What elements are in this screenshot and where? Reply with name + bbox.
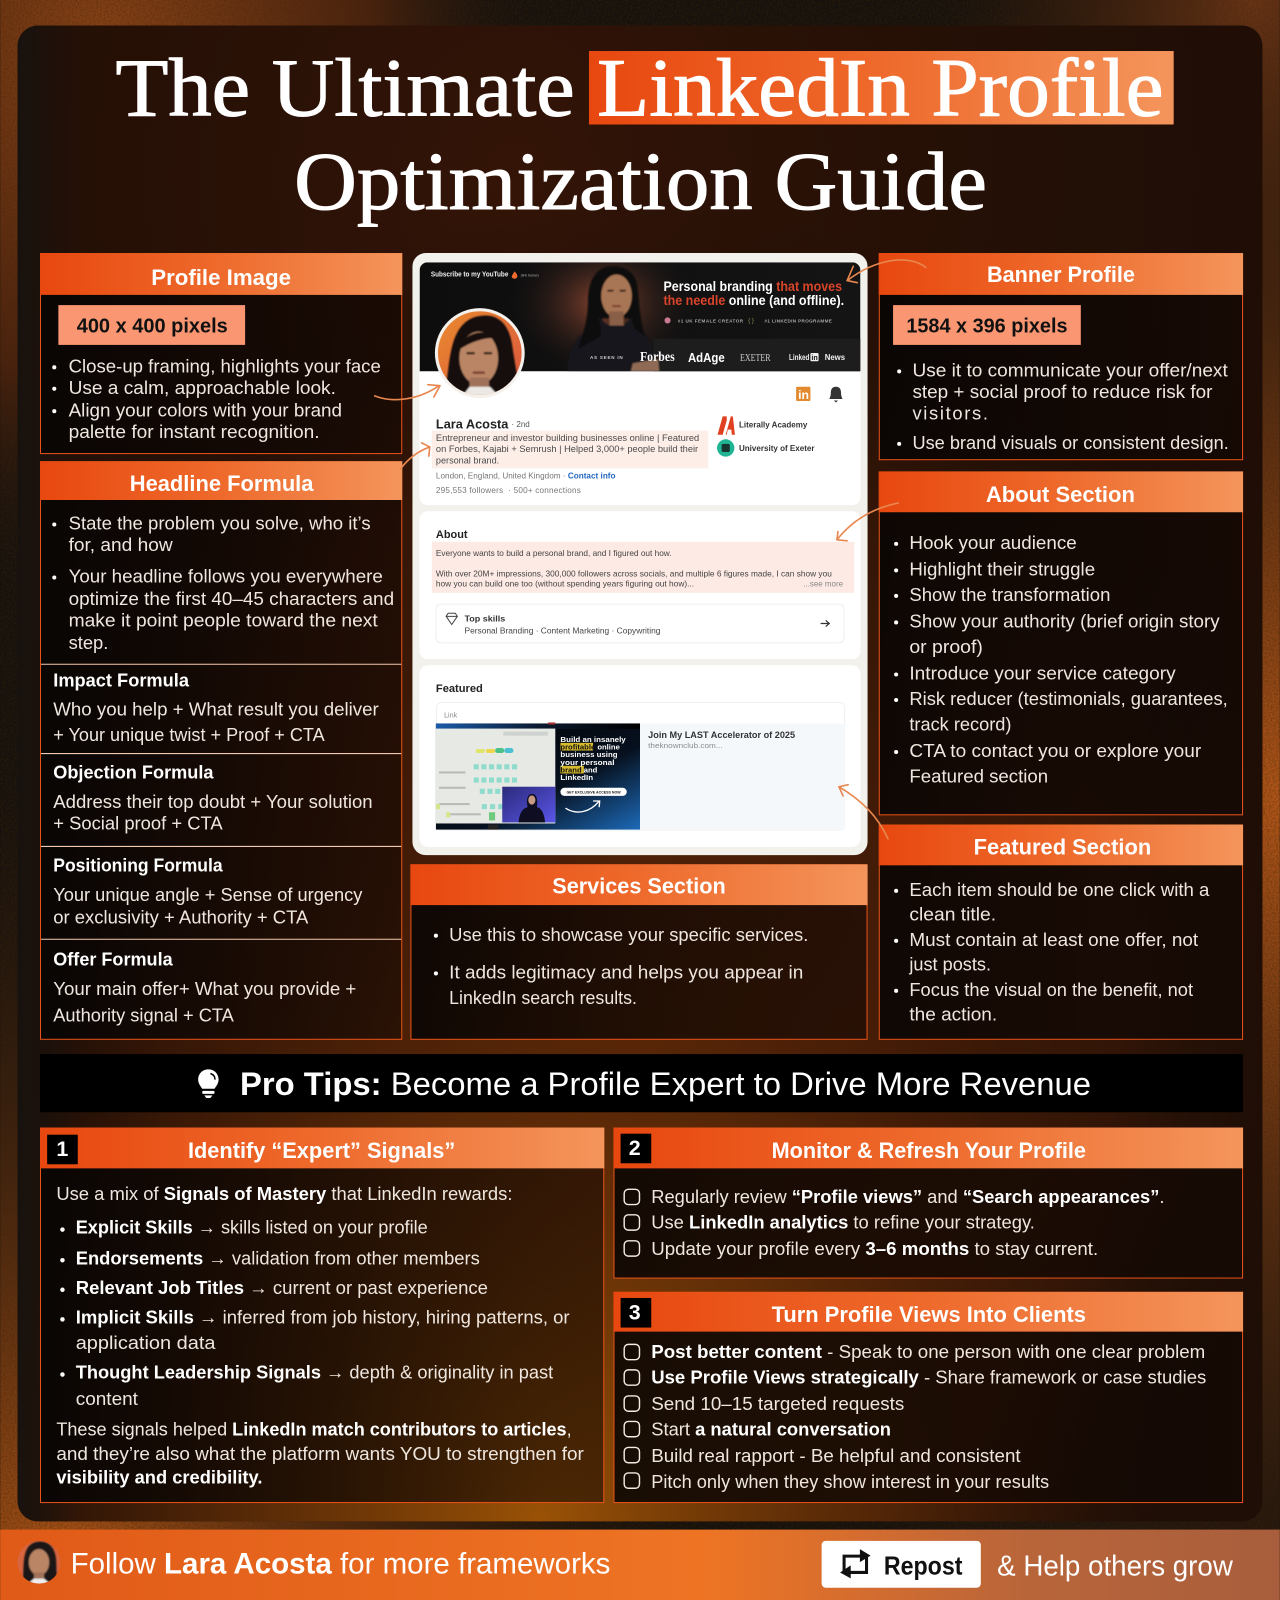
panel: featured section: Each item should be one click with a: [909, 879, 1210, 900]
heading: services section: Services Section: [552, 873, 726, 898]
impact formula: Who you help + What result you deliver: [53, 698, 379, 719]
panel: featured section: Focus the visual on the benefit, not: [909, 979, 1193, 1000]
panel: services section: It adds legitimacy and helps you appear in: [449, 962, 803, 983]
featured thumbnail: profitable online: [560, 742, 620, 751]
heading: headline formula: Headline Formula: [130, 471, 314, 496]
banner image: Forbes: [640, 349, 675, 364]
banner image: Subscribe to my YouTube: [431, 271, 508, 279]
number badge 3: 3: [629, 1300, 641, 1324]
panel 1: identify expert signals: application data: [76, 1332, 216, 1353]
panel: about section: Highlight their struggle: [909, 559, 1095, 580]
about highlight: ...see more: [803, 580, 844, 589]
about card: [420, 511, 860, 659]
heading: turn profile views into clients: Turn Profile Views Into Clients: [772, 1302, 1086, 1327]
featured thumbnail: business using: [560, 750, 618, 759]
headline highlight: Entrepreneur and investor building businesses online | Featured: [436, 433, 699, 443]
panel 1: identify expert signals: Endorsements → validation from other members: [76, 1247, 480, 1268]
panel 1: identify expert signals: visibility and credibility.: [56, 1467, 262, 1488]
arrow: featured section to featured: [839, 785, 888, 839]
positioning formula: Positioning Formula: [53, 854, 223, 875]
title: [116, 41, 1174, 227]
panel 3: turn profile views into clients: [613, 1292, 1243, 1503]
pro tips banner: [40, 1054, 1243, 1112]
offer formula: Offer Formula: [53, 948, 173, 969]
panel 1: identify expert signals: Thought Leadership Signals → depth & originality in past: [76, 1362, 553, 1383]
panel 3: turn profile views into clients: Use Profile Views strategically - Share framework or case studies: [651, 1367, 1206, 1388]
headline highlight: on Forbes, Kajabi + Semrush | Helped 3,000+ people build their: [436, 444, 698, 454]
featured thumbnail: Build an insanely: [560, 735, 626, 744]
panel: profile image: Use a calm, approachable look.: [69, 377, 336, 398]
title: LinkedIn Profile: [597, 41, 1163, 133]
panel: featured section: clean title.: [909, 903, 996, 924]
panel: about section: CTA to contact you or explore your: [909, 740, 1201, 761]
profile top card: · 2nd: [511, 420, 530, 429]
panel: profile image: 400 x 400 pixels: [77, 316, 228, 338]
profile avatar: [435, 308, 525, 400]
banner image: (link below): [521, 274, 539, 278]
company: literally academy: [718, 416, 808, 435]
panel: banner profile: Use brand visuals or consistent design.: [912, 432, 1229, 453]
panel: banner profile: step + social proof to reduce risk for: [912, 381, 1212, 402]
panel: headline formula: Your headline follows you everywhere: [69, 566, 383, 587]
objection formula: Address their top doubt + Your solution: [53, 791, 373, 812]
featured card: Featured: [436, 683, 483, 695]
video thumbnail: [502, 787, 555, 822]
title: The Ultimate: [116, 41, 575, 133]
linkedin profile mockup card: [412, 235, 868, 855]
impact formula: + Your unique twist + Proof + CTA: [53, 724, 325, 745]
heading: featured section: Featured Section: [974, 835, 1151, 860]
positioning formula: or exclusivity + Authority + CTA: [53, 906, 309, 927]
panel: banner profile: visitors.: [912, 402, 988, 423]
panel: headline formula: [40, 461, 402, 1039]
number badge 1: 1: [56, 1137, 68, 1161]
heading: banner profile: Banner Profile: [987, 262, 1135, 287]
panel 1: identify expert signals: Relevant Job Titles → current or past experience: [76, 1277, 488, 1298]
panel 3: turn profile views into clients: Send 10–15 targeted requests: [651, 1393, 904, 1414]
whiteboard: [436, 729, 555, 830]
panel: headline formula: step.: [69, 632, 108, 653]
offer formula: Your main offer+ What you provide +: [53, 978, 356, 999]
icon: bell: [829, 387, 843, 403]
company: literally academy: Literally Academy: [739, 421, 808, 430]
banner image: #1 UK FEMALE CREATOR: [678, 318, 744, 323]
panel: profile image: Align your colors with your brand: [69, 399, 342, 420]
profile top card: [420, 262, 860, 505]
panel: featured section: Must contain at least one offer, not: [909, 929, 1198, 950]
top skills box: Top skills: [464, 613, 505, 623]
panel: headline formula: State the problem you solve, who it’s: [69, 513, 371, 534]
panel 1: identify expert signals: [40, 1128, 604, 1503]
panel 3: turn profile views into clients: Post better content - Speak to one person with one clear problem: [651, 1341, 1205, 1362]
featured thumbnail: [436, 722, 640, 830]
featured description: theknownclub.com...: [648, 741, 723, 750]
objection formula: Objection Formula: [53, 762, 214, 783]
heading: monitor and refresh: Monitor & Refresh Your Profile: [772, 1138, 1086, 1163]
icon: repost: [841, 1550, 870, 1578]
footer avatar: [18, 1541, 60, 1585]
banner image: { }: [748, 317, 754, 324]
school: university of exeter: [717, 439, 815, 457]
panel 3: turn profile views into clients: Pitch only when they show interest in your results: [651, 1471, 1049, 1492]
panel: services section: [410, 864, 868, 1039]
featured card: Link: [444, 711, 458, 719]
panel: banner profile: Use it to communicate your offer/next: [912, 360, 1228, 381]
offer formula: Authority signal + CTA: [53, 1004, 235, 1025]
repost button: [822, 1541, 981, 1588]
panel: about section: Show your authority (brief origin story: [909, 611, 1220, 632]
panel: about section: Hook your audience: [909, 532, 1077, 553]
featured thumbnail: GET EXCLUSIVE ACCESS NOW: [567, 790, 621, 794]
panel: banner profile: 1584 x 396 pixels: [906, 316, 1068, 338]
banner image: in: [811, 354, 818, 362]
about highlight: Everyone wants to build a personal brand, and I figured out how.: [436, 549, 672, 558]
panel: about section: or proof): [909, 636, 983, 657]
panel: banner profile: [879, 253, 1243, 460]
heading: identify expert signals: Identify “Expert” Signals”: [188, 1138, 455, 1163]
icon: linkedin: [796, 387, 810, 402]
panel 3: turn profile views into clients: Build real rapport - Be helpful and consistent: [651, 1445, 1021, 1466]
about highlight: With over 20M+ impressions, 300,000 followers across socials, and multiple 6 figures made, I can show you: [436, 570, 832, 579]
school: university of exeter: University of Exeter: [739, 444, 815, 453]
panel 3: turn profile views into clients: Start a natural conversation: [651, 1419, 891, 1440]
panel 1: identify expert signals: These signals helped LinkedIn match contributors to articles,: [56, 1419, 572, 1440]
arrow: about section to about: [837, 503, 898, 541]
footer help text: & Help others grow: [997, 1551, 1233, 1583]
title: Optimization Guide: [294, 135, 987, 227]
panel 2: monitor and refresh: [613, 1128, 1243, 1278]
headline highlight: [432, 431, 708, 468]
profile location: London, England, United Kingdom · Contact info: [436, 472, 616, 481]
positioning formula: Your unique angle + Sense of urgency: [53, 884, 363, 905]
heading: about section: About Section: [986, 482, 1135, 507]
banner image: EXETER: [740, 353, 771, 364]
panel: featured section: the action.: [909, 1003, 997, 1024]
headline highlight: personal brand.: [436, 455, 499, 465]
panel 1: identify expert signals: and they’re also what the platform wants YOU to strengthen for: [56, 1443, 584, 1464]
panel: about section: Introduce your service category: [909, 663, 1177, 684]
icon: lightbulb: [198, 1069, 219, 1098]
about highlight: how you can build one too (without spending years figuring out how)...: [436, 580, 694, 589]
objection formula: + Social proof + CTA: [53, 813, 223, 834]
number badge 2: 2: [629, 1136, 641, 1160]
panel: about section: [879, 471, 1243, 815]
profile followers: 295,553 followers · 500+ connections: [436, 486, 581, 495]
panel 2: monitor and refresh: Use LinkedIn analytics to refine your strategy.: [651, 1212, 1035, 1233]
featured description: [640, 723, 845, 830]
panel 1: identify expert signals: Implicit Skills → inferred from job history, hiring patterns, or: [76, 1306, 570, 1327]
featured card: [420, 665, 860, 847]
banner image: Linked: [789, 353, 809, 362]
repost button: Repost: [884, 1552, 963, 1580]
number badge 3: [621, 1298, 651, 1328]
impact formula: [53, 670, 379, 745]
top skills box: Personal Branding · Content Marketing · Copywriting: [464, 627, 660, 636]
panel: about section: track record): [909, 714, 1011, 735]
banner image: AS SEEN IN: [590, 355, 623, 360]
panel 1: identify expert signals: Use a mix of Signals of Mastery that LinkedIn rewards:: [56, 1183, 512, 1204]
panel: about section: Risk reducer (testimonials, guarantees,: [909, 688, 1228, 709]
panel: services section: LinkedIn search results.: [449, 987, 637, 1008]
heading: profile image: Profile Image: [151, 265, 291, 290]
number badge 1: [47, 1135, 78, 1164]
panel: services section: Use this to showcase your specific services.: [449, 924, 808, 945]
banner image: Personal branding that moves: [663, 279, 842, 294]
number badge 2: [621, 1134, 651, 1163]
impact formula: Impact Formula: [53, 670, 190, 691]
objection formula: [53, 762, 373, 834]
featured thumbnail: LinkedIn: [560, 773, 593, 782]
panel: profile image: Close-up framing, highlights your face: [69, 355, 381, 376]
about highlight: [432, 542, 854, 593]
panel: about section: Show the transformation: [909, 584, 1110, 605]
top skills box: [436, 604, 844, 643]
banner image: #1 LINKEDIN PROGRAMME: [764, 318, 832, 323]
panel 2: monitor and refresh: Regularly review “Profile views” and “Search appearances”.: [651, 1186, 1164, 1207]
arrow: banner profile to banner: [847, 260, 926, 283]
panel: headline formula: make it point people toward the next: [69, 610, 378, 631]
banner image: [420, 262, 860, 372]
about card: About: [436, 529, 468, 541]
featured thumbnail: brand and: [560, 765, 598, 774]
positioning formula: [53, 854, 363, 927]
panel: featured section: just posts.: [908, 953, 991, 974]
featured description: Join My LAST Accelerator of 2025: [648, 730, 795, 740]
panel: profile image: [40, 253, 402, 454]
featured thumbnail: your personal: [560, 758, 614, 767]
arrow: headline formula to headline: [400, 443, 430, 469]
panel 2: monitor and refresh: Update your profile every 3–6 months to stay current.: [651, 1238, 1098, 1259]
banner image: News: [825, 353, 846, 362]
panel: headline formula: for, and how: [69, 534, 173, 555]
panel: about section: Featured section: [909, 766, 1048, 787]
pro tips banner: Pro Tips: Become a Profile Expert to Drive More Revenue: [240, 1065, 1091, 1102]
profile name: Lara Acosta: [436, 417, 509, 432]
footer: [0, 1530, 1280, 1600]
arrow: profile image to avatar: [375, 385, 440, 400]
panel: featured section: [879, 824, 1243, 1039]
panel: headline formula: optimize the first 40–45 characters and: [69, 588, 394, 609]
panel: profile image: palette for instant recognition.: [69, 421, 320, 442]
offer formula: [53, 948, 356, 1025]
panel 1: identify expert signals: content: [76, 1388, 138, 1409]
banner image: the needle online (and offline).: [663, 293, 844, 308]
icon: linkedin: in: [798, 388, 809, 402]
banner image: AdAge: [688, 350, 725, 365]
panel 1: identify expert signals: Explicit Skills → skills listed on your profile: [76, 1217, 428, 1238]
banner portrait: [568, 266, 659, 371]
footer follow text: Follow Lara Acosta for more frameworks: [71, 1547, 610, 1580]
